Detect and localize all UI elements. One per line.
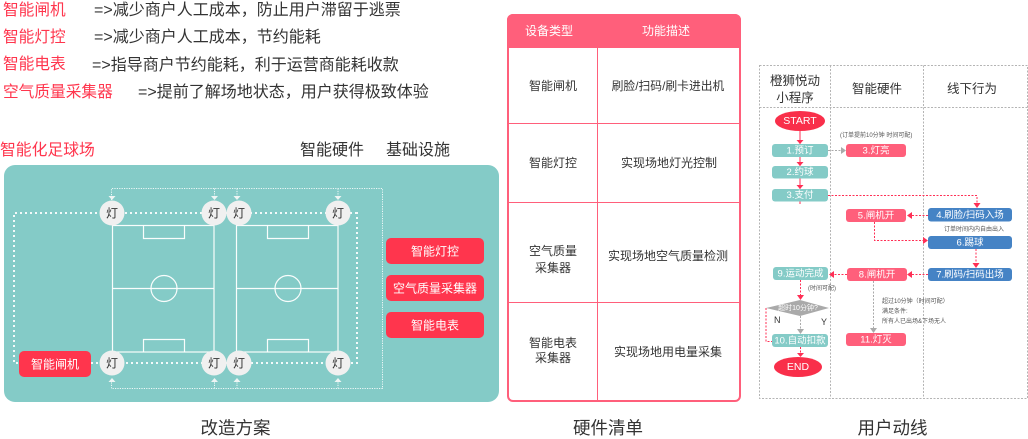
swimlane headers: 小程序	[776, 90, 814, 105]
table row: power meter: 采集器	[535, 350, 571, 365]
lights: 灯	[106, 356, 118, 370]
lights: 灯	[208, 356, 220, 370]
node: 11 light off: 11.灯灭	[860, 334, 892, 346]
text block: device benefits	[3, 1, 429, 101]
table row: smart lighting: 实现场地灯光控制	[621, 155, 717, 170]
heading: smart hardware: 智能硬件	[300, 141, 364, 159]
button: smart lighting control	[386, 238, 484, 264]
lights: 灯	[332, 356, 344, 370]
swimlane headers: 线下行为	[947, 82, 997, 96]
swimlane headers: 智能硬件	[852, 81, 902, 96]
panel: hardware list table	[507, 14, 741, 401]
caption: renovation plan: 改造方案	[200, 418, 270, 438]
button: smart lighting control: 智能灯控	[411, 244, 459, 258]
node: 5 gate open	[846, 209, 906, 222]
football pitch: left	[112, 226, 214, 352]
node: 1 reserve	[772, 144, 828, 157]
text block: device benefits: 智能闸机	[3, 1, 66, 19]
swimlane headers: 橙狮悦动	[770, 73, 820, 88]
button: smart gate: 智能闸机	[31, 356, 79, 372]
button: smart meter	[386, 312, 484, 338]
button: smart meter: 智能电表	[411, 318, 459, 332]
node: 4 enter by face or code	[928, 208, 1012, 222]
lights: 灯	[233, 206, 245, 220]
node: 3 light on	[846, 144, 906, 157]
node: start: START	[783, 115, 817, 127]
table row: power meter	[529, 335, 722, 365]
node: 2 book match	[772, 166, 828, 178]
text block: device benefits: =>减少商户人工成本，防止用户滞留于逃票	[94, 1, 401, 19]
text block: device benefits: 智能灯控	[3, 28, 66, 46]
node: 10 auto charge: 10.自动扣款	[774, 334, 826, 346]
thin dotted control loop	[108, 188, 382, 388]
node: 3 pay: 3.支付	[787, 189, 814, 201]
node: start	[775, 111, 825, 131]
node: 6 play football	[928, 236, 1012, 249]
lights	[100, 200, 350, 376]
caption: user flow: 用户动线	[858, 418, 928, 438]
table row: air quality: 采集器	[535, 260, 571, 275]
note: light off conditions: 超过10分钟（时间可配）	[882, 297, 949, 305]
table row: smart lighting	[529, 155, 717, 170]
table row: power meter: 实现场地用电量采集	[614, 344, 722, 359]
label: yes: Y	[821, 317, 827, 327]
button: smart gate	[19, 351, 91, 377]
node: end: END	[787, 361, 810, 373]
lights: 灯	[208, 206, 220, 220]
heading: smart football field: 智能化足球场	[0, 141, 95, 159]
decision: over ten minutes: 超时10分钟?	[778, 303, 818, 312]
table row: smart gate	[529, 78, 725, 93]
swimlane grid	[760, 66, 1028, 398]
lights: 灯	[233, 356, 245, 370]
node: 1 reserve: 1.预订	[787, 146, 814, 156]
heading: infrastructure: 基础设施	[386, 141, 450, 159]
thick dotted power loop	[14, 213, 357, 363]
flow connectors	[766, 131, 980, 357]
decision: over ten minutes	[766, 300, 829, 316]
text block: device benefits: =>提前了解场地状态，用户获得极致体验	[138, 83, 429, 101]
button: air quality collector: 空气质量采集器	[393, 280, 477, 296]
table row: smart gate: 智能闸机	[529, 78, 577, 93]
node: 3 light on: 3.灯亮	[863, 144, 889, 156]
note: light off conditions: 所有人已出场&下场无人	[882, 317, 946, 325]
table row: smart gate: 刷脸/扫码/刷卡进出机	[612, 79, 725, 93]
swimlane headers	[770, 73, 997, 105]
table row: air quality: 空气质量	[529, 243, 577, 258]
node: 4 enter by face or code: 4.刷脸/扫码入场	[936, 209, 1004, 221]
node: 11 light off	[846, 333, 906, 346]
table row: air quality	[529, 243, 728, 275]
football pitch: right	[236, 226, 338, 352]
panel background	[4, 165, 499, 402]
node: 8 gate open	[847, 268, 907, 281]
node: 2 book match: 2.约球	[787, 166, 814, 178]
text block: device benefits: =>减少商户人工成本，节约能耗	[94, 28, 321, 46]
button: air quality collector	[386, 275, 484, 301]
table row: smart lighting: 智能灯控	[529, 155, 577, 170]
panel: renovation plan	[4, 165, 499, 402]
table header: 功能描述	[642, 24, 690, 38]
node: 8 gate open: 8.闸机开	[859, 268, 896, 280]
label: no: N	[774, 315, 780, 325]
node: 7 exit by code	[928, 268, 1012, 281]
lights: 灯	[106, 206, 118, 220]
node: end	[774, 357, 822, 377]
note: free entry during order: 订单时间内内自由出入	[944, 225, 1004, 233]
node: 5 gate open: 5.闸机开	[858, 210, 895, 222]
node: 6 play football: 6.踢球	[957, 236, 984, 248]
table row: air quality: 实现场地空气质量检测	[608, 248, 728, 263]
table row: power meter: 智能电表	[529, 335, 577, 350]
caption: hardware list: 硬件清单	[573, 418, 643, 438]
text block: device benefits: =>指导商户节约能耗，利于运营商能耗收款	[92, 56, 399, 74]
node: 3 pay	[772, 189, 828, 202]
node: 7 exit by code: 7.刷码/扫码出场	[936, 268, 1004, 280]
table grid	[508, 15, 740, 401]
text block: device benefits: 智能电表	[3, 55, 66, 73]
note: light off conditions	[882, 297, 949, 325]
node: 9 activity complete: 9.运动完成	[778, 268, 824, 280]
note: ten minutes before order: (订单提前10分钟 时间可配)	[840, 131, 912, 139]
note: configurable time: (时间可配)	[808, 284, 836, 292]
lights: 灯	[332, 206, 344, 220]
text block: device benefits: 空气质量采集器	[3, 83, 113, 101]
panel: user flow chart	[760, 66, 1028, 398]
table header: 设备类型	[525, 24, 573, 38]
note: light off conditions: 满足条件:	[882, 307, 908, 315]
table header	[507, 14, 741, 48]
